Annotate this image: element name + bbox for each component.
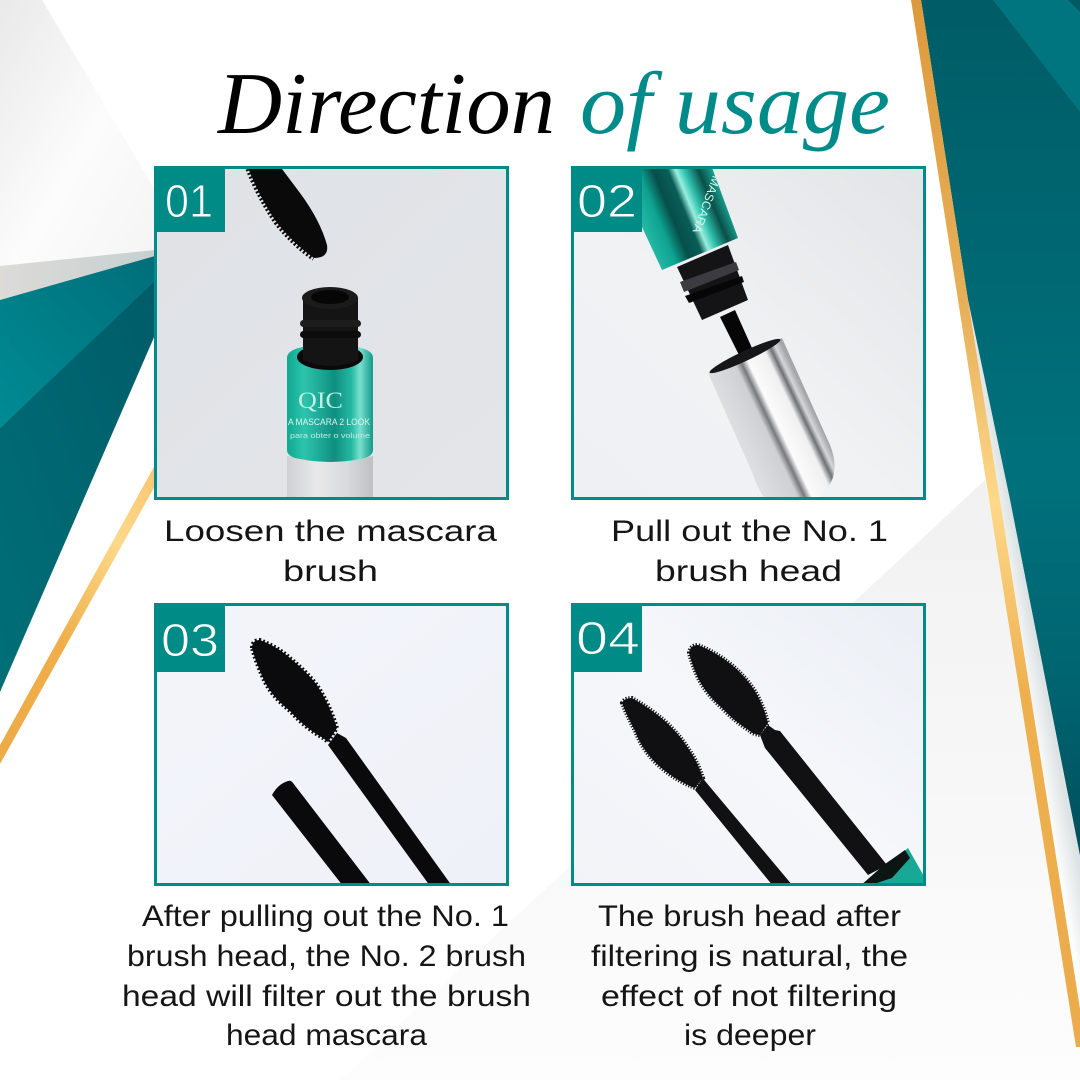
icon: teal cap with label: MASCARA: [690, 174, 723, 235]
icon: silver bottle body: [287, 456, 373, 500]
icon: wand rod: [720, 310, 752, 357]
caption: step 02: Pull out the No. 1: [611, 515, 888, 548]
badge: 03: [154, 603, 225, 672]
caption: step 04: [591, 900, 908, 1052]
title: [217, 56, 890, 153]
title: of usage: [580, 56, 890, 153]
caption: step 04: is deeper: [684, 1019, 816, 1052]
icon: teal bottle collar with label: [287, 344, 373, 462]
caption: step 04: effect of not filtering: [601, 980, 897, 1013]
badge: 01: [154, 166, 225, 232]
icon: black neck: [677, 245, 748, 320]
icon: left mascara wand: [622, 698, 793, 886]
caption: step 03: brush head, the No. 2 brush: [127, 940, 526, 973]
badge: 02: 02: [577, 175, 637, 227]
icon: silver tube: [708, 335, 835, 500]
caption: step 02: brush head: [655, 555, 842, 588]
icon: black bottle neck: [300, 287, 361, 366]
panel: step 03: [156, 604, 508, 886]
title: Direction: [217, 56, 555, 153]
icon: teal cap with label: [642, 165, 738, 270]
background: faint grey triangle bottom right: [340, 480, 1080, 1080]
badge: 01: 01: [165, 175, 213, 227]
badge: 02: [571, 166, 642, 232]
background: pale triangle top left: [0, 0, 155, 266]
left decoration: gold stripe: [0, 465, 155, 764]
caption: step 03: head will filter out the brush: [122, 980, 531, 1013]
icon: open tube: [272, 781, 372, 886]
right decoration: teal facets: [921, 0, 1080, 1000]
panel: step 01: [156, 165, 508, 500]
left decoration: teal facets: [0, 250, 155, 692]
icon: teal bottle collar with label: QIC: [298, 388, 343, 413]
caption: step 03: After pulling out the No. 1: [142, 900, 509, 933]
icon: mascara brush falling: [247, 165, 327, 258]
icon: right mascara wand: [689, 645, 887, 875]
panel: step 02: [572, 165, 924, 500]
badge: 04: 04: [576, 612, 640, 664]
caption: step 01: [164, 515, 498, 588]
badge: 03: 03: [161, 614, 219, 666]
panel: step 04: [572, 604, 925, 886]
caption: step 04: The brush head after: [598, 900, 901, 933]
icon: teal bottle collar with label: A MASCARA 2 LOOK: [288, 417, 371, 428]
icon: mascara wand: [252, 640, 452, 886]
caption: step 03: head mascara: [226, 1019, 428, 1052]
caption: step 04: filtering is natural, the: [591, 940, 908, 973]
icon: teal bottle collar with label: para obter o volume: [290, 433, 370, 440]
caption: step 01: Loosen the mascara: [164, 515, 498, 548]
badge: 04: [571, 603, 642, 672]
caption: step 03: [122, 900, 531, 1052]
right decoration: gold stripe: [911, 0, 1080, 1047]
caption: step 02: [611, 515, 888, 588]
icon: teal collar at corner: [864, 848, 923, 883]
caption: step 01: brush: [283, 555, 378, 588]
